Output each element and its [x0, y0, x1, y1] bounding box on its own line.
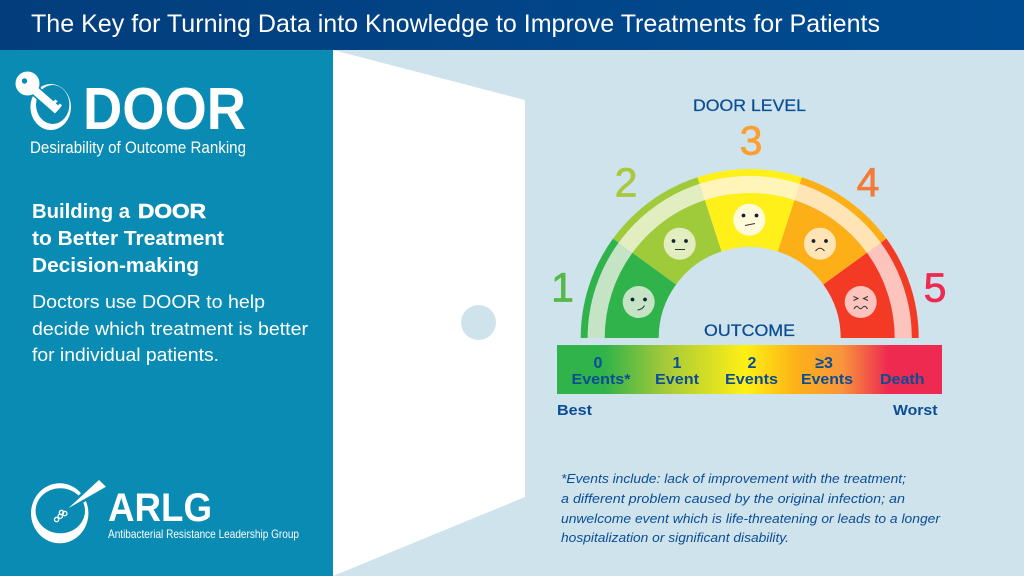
footnote: unwelcome event which is life-threatening or leads to a longer — [561, 511, 941, 526]
body text: decide which treatment is better — [32, 318, 308, 339]
door — [333, 50, 525, 576]
heading: to Better Treatment — [32, 228, 224, 250]
segment 2 lime — [616, 181, 713, 269]
icon: happy face — [623, 286, 655, 318]
title: The Key for Turning Data into Knowledge to Improve Treatments for Patients — [31, 10, 880, 38]
footnote: hospitalization or significant disability. — [561, 530, 789, 545]
ARLG wordmark: ARLG — [108, 486, 212, 530]
ARLG tagline: Antibacterial Resistance Leadership Group — [108, 527, 299, 541]
DOOR level heading: DOOR LEVEL — [693, 97, 806, 115]
icon: slightly unsure face — [733, 204, 765, 236]
gauge — [584, 173, 915, 338]
worst label: Worst — [893, 402, 938, 419]
outcome labels: Death — [880, 371, 924, 388]
door knob — [461, 305, 496, 340]
level numbers: 5 — [924, 264, 946, 310]
heading — [32, 201, 224, 277]
ARLG logo — [31, 480, 299, 543]
icon: petri dish — [31, 480, 106, 543]
best label: Best — [557, 402, 592, 419]
level numbers: 1 — [551, 264, 574, 310]
segment 4 orange — [786, 181, 884, 269]
outcome labels: 1 — [673, 355, 682, 372]
header bar — [0, 0, 1024, 50]
footnote — [561, 471, 941, 545]
icon: sad face — [804, 228, 836, 260]
footnote: a different problem caused by the original infection; an — [561, 491, 905, 506]
segment 5 red — [845, 241, 915, 338]
DOOR logo — [14, 70, 246, 157]
outcome heading: OUTCOME — [704, 321, 795, 340]
heading: Decision-making — [32, 255, 199, 277]
level numbers: 3 — [740, 118, 762, 164]
outcome labels: 2 — [748, 355, 757, 372]
level numbers: 4 — [857, 160, 879, 206]
segment 1 green — [584, 241, 654, 338]
panel: left sidebar — [0, 50, 333, 576]
logo wordmark: DOOR — [83, 76, 246, 142]
icon: pained face — [845, 286, 877, 318]
outcome labels — [572, 355, 924, 388]
footnote: *Events include: lack of improvement with the treatment; — [561, 471, 906, 486]
body text: Doctors use DOOR to help — [32, 291, 265, 312]
body text: for individual patients. — [32, 344, 219, 365]
level numbers — [551, 118, 946, 310]
icon: key in ring — [14, 70, 71, 130]
outcome labels: Events — [725, 371, 778, 388]
outcome labels: Events — [801, 371, 853, 388]
level numbers: 2 — [615, 160, 637, 206]
body text — [32, 291, 308, 365]
heading: DOOR — [138, 201, 207, 223]
outcome gradient bar — [557, 345, 942, 394]
logo tagline: Desirability of Outcome Ranking — [30, 139, 246, 157]
heading: Building a — [32, 201, 131, 223]
outcome labels: Event — [655, 371, 699, 388]
outcome labels: Events* — [572, 371, 631, 388]
segment 3 yellow — [699, 173, 801, 226]
outcome labels: ≥3 — [815, 355, 833, 372]
icon: neutral face — [664, 228, 696, 260]
outcome labels: 0 — [594, 355, 603, 372]
